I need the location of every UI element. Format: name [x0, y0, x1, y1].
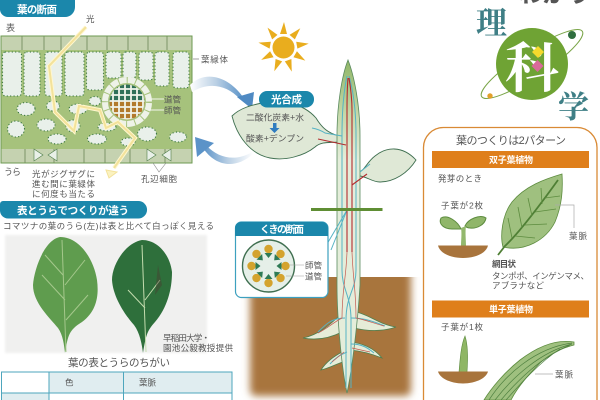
text: photosynthesis formula: 酸素+デンプン — [246, 132, 304, 144]
label: monocot vein: 葉脈 — [555, 370, 573, 380]
photo background — [5, 235, 207, 353]
label: two cotyledons: 子葉が2枚 — [441, 200, 483, 210]
icon: dicot leaf with net veins — [498, 174, 562, 255]
phloem lines — [318, 78, 367, 252]
text: komatsuna caption: コマツナの葉のうら(左)は表と比べて白っぽく見える — [3, 221, 214, 231]
heading: leaf cross-section — [0, 0, 75, 17]
text: light zigzag caption — [32, 169, 95, 199]
xylem lines — [312, 76, 385, 388]
diamonds — [532, 46, 544, 72]
icon: monocot leaf with parallel veins — [484, 341, 574, 400]
plant — [232, 60, 416, 393]
photo: leaf underside — [33, 237, 98, 353]
text: net veins: 網目状 — [492, 259, 516, 269]
label: xylem and phloem: 道管 — [164, 94, 181, 104]
text: net veins: タンポポ、インゲンマメ、 — [492, 271, 589, 281]
root branches — [303, 312, 396, 370]
photosynthesis label — [259, 91, 314, 108]
label: dicot vein — [555, 205, 587, 241]
photo: leaf upper side — [112, 240, 172, 353]
right leaf — [359, 149, 416, 182]
section bar: monocot — [432, 300, 589, 318]
icon: monocot seedling — [438, 336, 488, 384]
light path arrow — [49, 27, 135, 178]
label: upper surface: 表 — [6, 23, 15, 33]
text: photosynthesis formula — [246, 112, 304, 144]
panel: leaf cross-section — [0, 0, 228, 199]
label: chloroplast: 葉緑体 — [201, 54, 228, 64]
comparison table: 葉脈 — [139, 378, 156, 388]
green planet — [496, 28, 568, 100]
text: light zigzag caption: 進む間に葉緑体 — [32, 179, 95, 189]
panel: stem cross-section — [235, 222, 328, 298]
vascular bundle — [105, 80, 149, 124]
logo: rika — [475, 0, 592, 127]
panel: two leaf patterns — [424, 128, 597, 400]
text: photosynthesis formula: 二酸化炭素+水 — [246, 112, 304, 122]
label: phloem and xylem: 道管 — [305, 272, 322, 282]
label: light: 光 — [86, 14, 95, 24]
arrow: cross-section to photosynthesis — [190, 77, 254, 109]
text: photo credit: 園池公毅教授提供 — [163, 343, 233, 353]
arrow: photosynthesis back to cross-section — [195, 137, 253, 164]
logo glyph: 学: 学 — [558, 82, 589, 127]
panel: leaf photo section — [0, 201, 233, 400]
text: light zigzag caption: に何度も当たる — [32, 189, 95, 199]
heading: structure differs — [0, 201, 147, 218]
label: monocot vein — [535, 370, 573, 380]
text: net veins — [492, 259, 589, 290]
photosynthesis label: 光合成 — [271, 93, 302, 106]
text: photo credit — [163, 333, 233, 353]
main leaf — [232, 102, 339, 159]
text: net veins: アブラナなど — [492, 280, 544, 290]
section bar: dicot — [432, 151, 589, 168]
label: guard cells: 孔辺細胞 — [141, 174, 177, 184]
label: phloem and xylem — [286, 260, 322, 282]
text: photo credit: 早稲田大学・ — [163, 333, 210, 343]
logo glyph: 科: 科 — [505, 26, 559, 103]
table title: 葉の表とうらのちがい — [68, 356, 170, 369]
label: phloem and xylem: 師管 — [305, 260, 322, 270]
heading: leaf cross-section: 葉の断面 — [17, 3, 57, 16]
comparison table: 色 — [65, 378, 74, 388]
heading: structure differs: 表とうらでつくりが違う — [17, 204, 129, 217]
stem and root — [337, 60, 360, 393]
label: dicot vein: 葉脈 — [569, 231, 587, 241]
diagram: stem circle with vascular bundles — [242, 240, 294, 292]
section bar: dicot: 双子葉植物 — [489, 154, 533, 165]
label: xylem and phloem: 師管 — [164, 106, 181, 116]
section bar: monocot: 単子葉植物 — [489, 304, 533, 314]
orbit ring — [475, 20, 589, 108]
leaf tissue — [1, 36, 192, 163]
comparison table — [1, 372, 232, 400]
text: light zigzag caption: 光がジグザグに — [32, 169, 95, 179]
heading: stem cross-section: くきの断面 — [260, 223, 304, 236]
label: guard cells — [141, 163, 177, 184]
stem cut line — [311, 208, 382, 211]
label: underside: うら — [4, 167, 21, 177]
chloroplast cells — [2, 52, 189, 146]
text: at germination: 発芽のとき — [438, 174, 482, 184]
soil — [250, 260, 411, 396]
label: one cotyledon: 子葉が1枚 — [441, 322, 483, 332]
icon: dicot seedling — [438, 217, 488, 258]
icon: sun — [258, 22, 309, 73]
label: xylem and phloem — [148, 94, 181, 116]
heading: two patterns: 葉のつくりは2パターン — [456, 133, 566, 147]
orbit planets — [487, 31, 576, 99]
